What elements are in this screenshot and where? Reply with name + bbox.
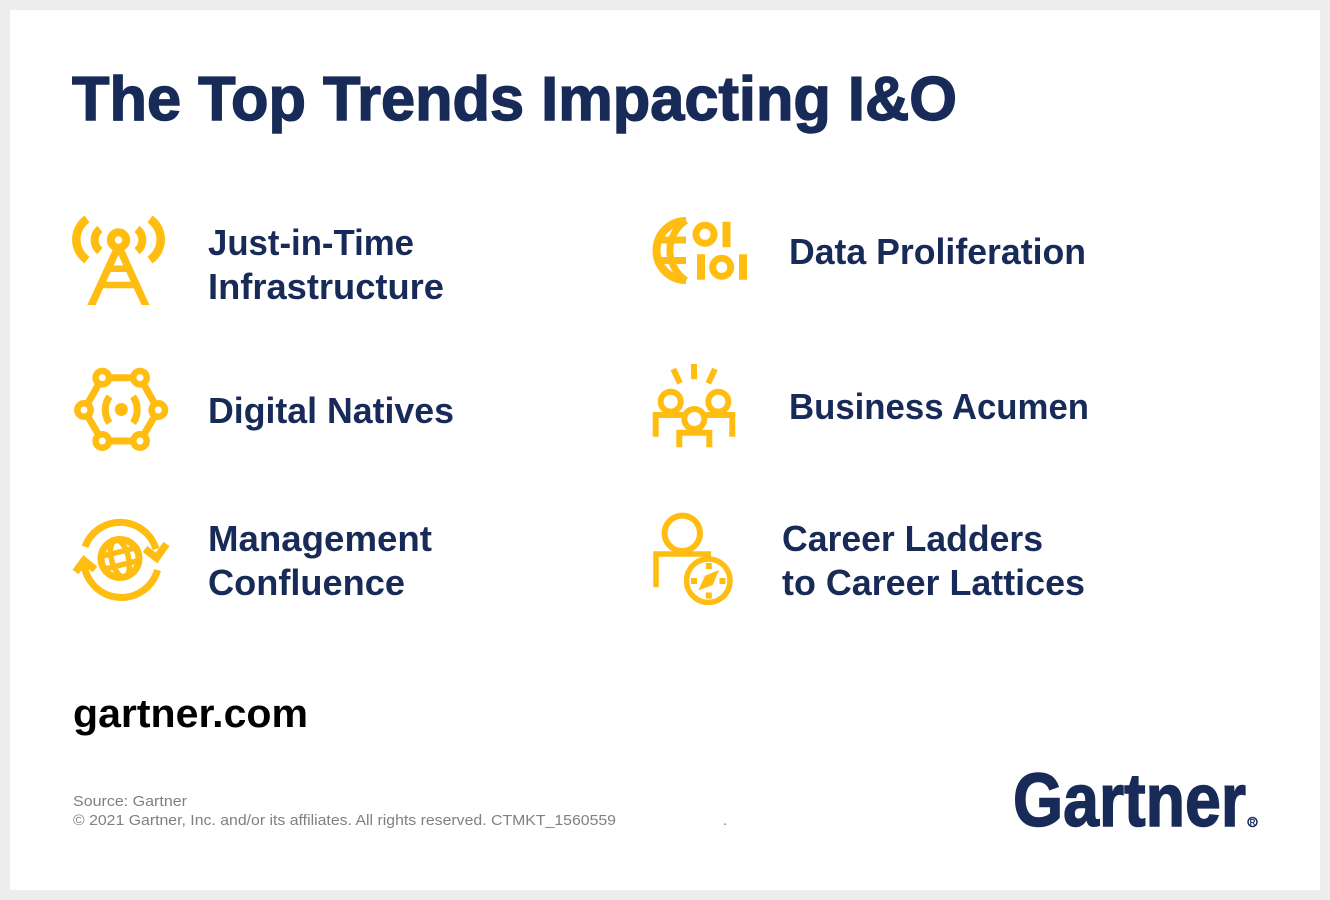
trend: Digital Natives [77, 371, 454, 448]
label: Career Ladders to Career Lattices [782, 518, 1085, 603]
source and copyright: . [723, 812, 727, 829]
source and copyright [73, 793, 727, 829]
label: Management Confluence [208, 518, 432, 603]
label: Career Ladders to Career Lattices: to Career Lattices [782, 562, 1085, 603]
title: The Top Trends Impacting I&O [72, 65, 957, 134]
label: Career Ladders to Career Lattices: Career Ladders [782, 518, 1043, 559]
Gartner logo: Gartner [1013, 758, 1246, 842]
trend: Business Acumen [656, 364, 1089, 447]
label: Just-in-Time Infrastructure: Infrastructure [208, 266, 444, 307]
label: Just-in-Time Infrastructure: Just-in-Time [208, 222, 414, 263]
icon: hexagon network [77, 371, 165, 448]
website link text: gartner.com [73, 692, 308, 736]
trend: Career Ladders to Career Lattices [656, 516, 1085, 603]
icon: radio tower [76, 219, 161, 305]
icon: half globe with binary digits [656, 220, 743, 280]
label: Management Confluence: Management [208, 518, 432, 559]
label: Digital Natives: Digital Natives [208, 390, 454, 431]
label: Data Proliferation: Data Proliferation [789, 231, 1086, 272]
Gartner logo: R [1250, 818, 1256, 827]
label: Just-in-Time Infrastructure [208, 222, 444, 307]
trend: Management Confluence [76, 518, 432, 603]
icon: person with compass [656, 516, 730, 602]
trend: Just-in-Time Infrastructure [76, 219, 444, 307]
trend: Data Proliferation [656, 220, 1086, 280]
icon: three people with idea rays [656, 364, 732, 447]
source and copyright: © 2021 Gartner, Inc. and/or its affiliates. All rights reserved. CTMKT_1560559 [73, 812, 616, 829]
label: Business Acumen: Business Acumen [789, 386, 1089, 427]
source and copyright: Source: Gartner [73, 793, 187, 810]
icon: globe with rotating arrows [76, 522, 166, 597]
label: Management Confluence: Confluence [208, 562, 405, 603]
